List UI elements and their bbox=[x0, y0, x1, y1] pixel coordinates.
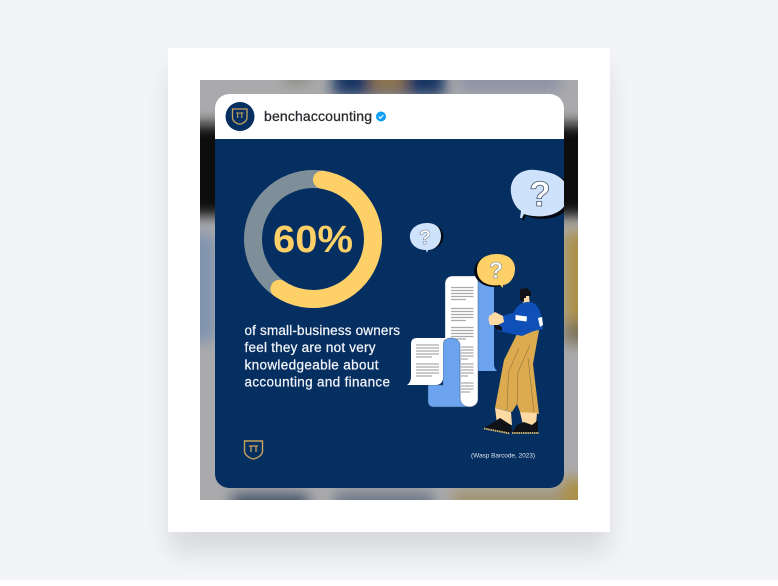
blue curled sheet bbox=[428, 338, 470, 407]
big blue question bubble bbox=[510, 170, 564, 220]
trouser seams bbox=[507, 345, 534, 412]
receipt text lines bbox=[451, 288, 474, 392]
left paper text lines bbox=[416, 345, 439, 376]
illustration: man holding receipt bbox=[484, 288, 543, 434]
statement text: knowledgeable about bbox=[244, 358, 379, 372]
donut chart: 60% bbox=[253, 179, 373, 299]
left paper fold bbox=[407, 338, 448, 385]
legs and trousers bbox=[495, 325, 540, 414]
left shoe bbox=[484, 418, 512, 433]
card drop shadow bbox=[170, 70, 608, 552]
yellow question bubble bbox=[474, 254, 515, 288]
avatar bbox=[226, 102, 254, 131]
yellow question bubble: ? bbox=[489, 257, 503, 283]
verified badge bbox=[376, 112, 386, 122]
illustration: speech bubbles bbox=[410, 170, 572, 288]
statement text bbox=[244, 323, 400, 390]
statement text: feel they are not very bbox=[244, 340, 376, 355]
small blue question bubble bbox=[410, 223, 444, 253]
illustration: receipt scroll bbox=[407, 276, 497, 407]
white frame card bbox=[168, 48, 610, 532]
ankles bbox=[495, 408, 537, 425]
statement text: of small-business owners bbox=[244, 323, 400, 338]
account name: benchaccounting bbox=[264, 108, 372, 124]
post card bbox=[215, 94, 564, 488]
statement text: accounting and finance bbox=[244, 374, 390, 390]
big blue question bubble: ? bbox=[529, 175, 551, 214]
post body bbox=[215, 94, 564, 488]
white shirt patch bbox=[516, 315, 543, 327]
main long receipt bbox=[445, 276, 478, 407]
post header bbox=[215, 94, 564, 139]
dark cuff bbox=[494, 324, 502, 331]
source citation: (Wasp Barcode, 2023) bbox=[471, 452, 535, 460]
donut track bbox=[253, 179, 373, 299]
torso and sweater bbox=[512, 302, 543, 334]
percentage label: 60% bbox=[273, 219, 353, 261]
shoe soles bbox=[484, 428, 539, 434]
hand bbox=[488, 312, 504, 325]
footer logo bbox=[244, 441, 262, 459]
right shoe bbox=[512, 420, 538, 433]
donut value arc bbox=[280, 180, 373, 299]
back sheet bbox=[476, 276, 497, 371]
arm bbox=[498, 312, 536, 336]
head and hair bbox=[520, 288, 531, 309]
small blue question bubble: ? bbox=[419, 227, 431, 249]
blurred photo backdrop bbox=[200, 80, 578, 500]
